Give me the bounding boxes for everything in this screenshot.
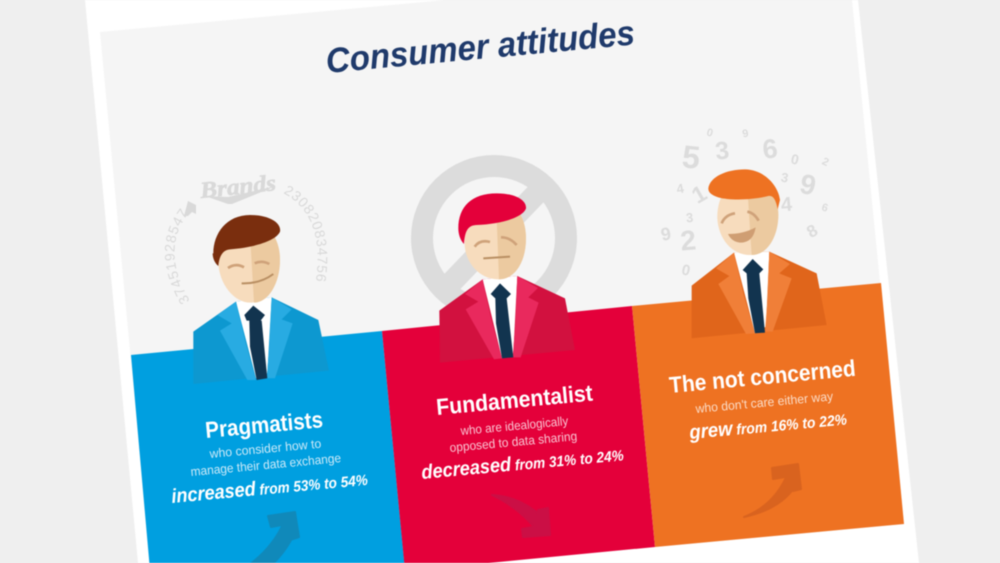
icon: scattered numbers: 2 xyxy=(820,156,831,169)
arrow: increase xyxy=(242,512,299,563)
icon: scattered numbers: 3 xyxy=(780,170,790,186)
icon: prohibition sign xyxy=(422,166,566,310)
panel: not concerned xyxy=(632,283,904,547)
icon: scattered numbers: 4 xyxy=(780,194,794,216)
icon: scattered numbers xyxy=(659,127,831,280)
icon: scattered numbers: 1 xyxy=(687,180,711,209)
text: not concerned: grew from 16% to 22% xyxy=(688,407,848,444)
icon: scattered numbers: 6 xyxy=(820,202,829,215)
icon: scattered numbers: 2 xyxy=(679,224,697,257)
arrow: decrease xyxy=(492,495,550,537)
icon: brands and numbers around pragmatist xyxy=(164,170,328,304)
text: not concerned xyxy=(668,355,857,444)
icon: scattered numbers: 3 xyxy=(714,136,731,166)
text: not concerned: who don't care either way xyxy=(694,389,834,416)
text: fundamentalist: opposed to data sharing xyxy=(449,429,578,455)
text: pragmatists: who consider how to xyxy=(208,437,322,461)
icon: scattered numbers: 5 xyxy=(680,138,702,176)
icon: brands and numbers around pragmatist: 230820834756 xyxy=(284,186,328,281)
title: Consumer attitudes xyxy=(324,13,636,81)
icon: scattered numbers: 9 xyxy=(659,223,673,245)
figure: not concerned man xyxy=(692,169,827,338)
arrow: growth xyxy=(744,464,801,517)
text: fundamentalist xyxy=(420,380,625,484)
icon: brands and numbers around pragmatist: Brands xyxy=(198,170,277,203)
icon: scattered numbers: 3 xyxy=(685,210,694,225)
icon: scattered numbers: 8 xyxy=(803,221,821,242)
text: fundamentalist: who are idealogically xyxy=(459,414,570,438)
icon: scattered numbers: 9 xyxy=(797,168,819,201)
text: pragmatists: manage their data exchange xyxy=(190,451,342,479)
icon: scattered numbers: 0 xyxy=(680,261,692,280)
figure: fundamentalist man xyxy=(439,193,575,363)
text: fundamentalist: Fundamentalist xyxy=(435,380,594,420)
panel: fundamentalist xyxy=(382,306,655,563)
panel: pragmatists xyxy=(131,331,405,563)
icon: scattered numbers: 6 xyxy=(761,133,779,165)
icon: scattered numbers: 0 xyxy=(705,127,714,140)
icon: scattered numbers: 4 xyxy=(675,180,686,197)
text: fundamentalist: decreased from 31% to 24% xyxy=(420,443,625,484)
text: pragmatists: increased from 53% to 54% xyxy=(170,468,369,508)
figure: pragmatist man xyxy=(193,215,329,384)
text: pragmatists: Pragmatists xyxy=(204,406,324,443)
text: not concerned: The not concerned xyxy=(668,355,857,398)
icon: brands and numbers around pragmatist: 37451928547 xyxy=(164,208,189,304)
text: pragmatists xyxy=(170,406,369,508)
icon: scattered numbers: 9 xyxy=(741,128,750,140)
icon: scattered numbers: 0 xyxy=(790,150,801,168)
